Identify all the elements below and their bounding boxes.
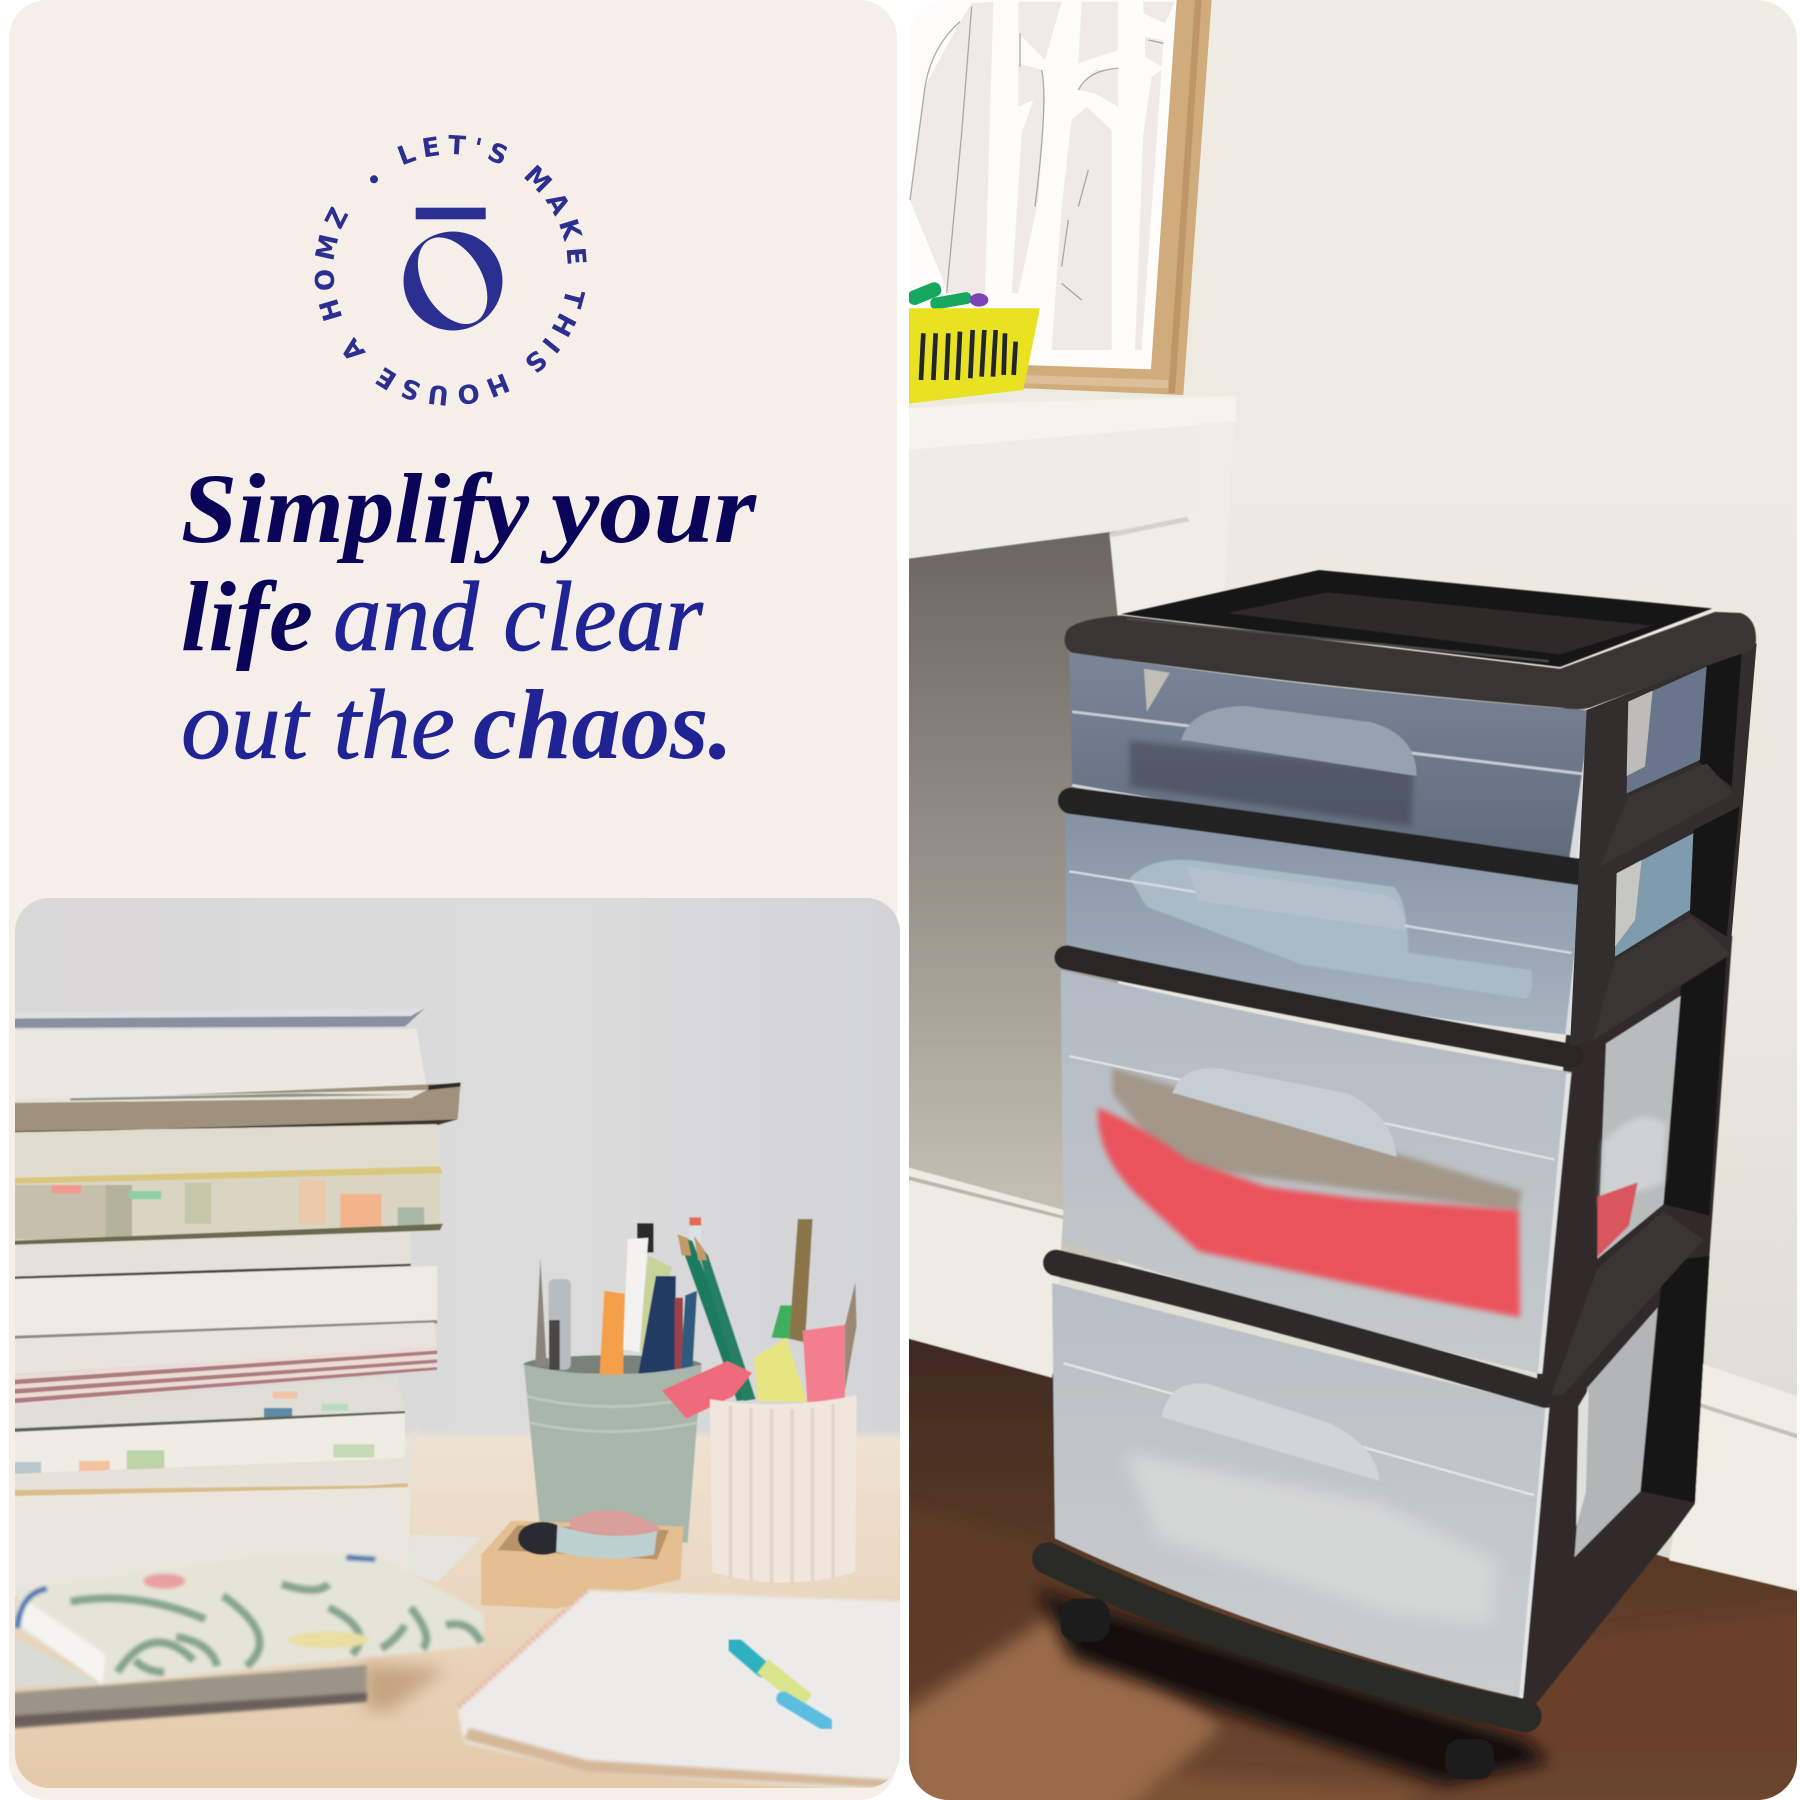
ribbed ceramic cup [710, 1395, 857, 1583]
wall background [15, 898, 900, 1437]
birch bark lines [910, 7, 1163, 300]
logo: dot separator [370, 175, 378, 183]
pink washi tape [662, 1361, 752, 1419]
heading line 3 [181, 669, 733, 780]
band between drawers 1 and 2 [1071, 801, 1583, 872]
rail 2 [1593, 917, 1730, 1040]
cart upper side panel [1570, 643, 1757, 1047]
left baseboard [900, 1165, 1064, 1378]
photo: plastic drawer cart in room corner [900, 0, 1800, 1800]
top frame band [1065, 612, 1756, 709]
rail 1 [1600, 763, 1733, 867]
cast shadow [1038, 1590, 1549, 1785]
band between drawers 3 and 4 [1056, 1263, 1546, 1395]
white desk [900, 396, 1236, 620]
floral fabric book [15, 1555, 484, 1687]
drawer 2 [1065, 809, 1589, 1035]
tan fabric [1112, 1068, 1523, 1211]
wood frame [1023, 0, 1212, 395]
heading line 2: life [181, 561, 313, 672]
right baseboard [1669, 1363, 1800, 1596]
drawer 4 [1052, 1283, 1549, 1698]
spiral notebook [456, 1588, 900, 1788]
logo: circular tagline text: LET'S MAKE THIS HOUSE A HOMZ [314, 134, 587, 406]
lower side windows [1574, 996, 1681, 1557]
logo: tilted ring letter o [404, 225, 502, 336]
wooden tray with tape rolls [481, 1510, 684, 1609]
lower dark book [12, 1663, 446, 1728]
logo: circular badge [314, 134, 587, 406]
heading: Simplify your life and clear out the chaos [181, 453, 757, 780]
logo: macron bar [416, 208, 486, 219]
heading line 3: out the [181, 669, 455, 780]
heading line 1 [181, 453, 757, 564]
cart lid [1121, 570, 1712, 667]
caster wheels [1061, 1599, 1494, 1779]
drawer 1 [1069, 651, 1596, 859]
teal and yellow pen [733, 1644, 827, 1725]
under desk shadow wall [900, 531, 1118, 1263]
heading line 1: your [539, 453, 757, 564]
table surface [0, 1434, 939, 1800]
black slots [1690, 653, 1742, 937]
heading line 2: and clear [333, 561, 704, 672]
drawer cart [1048, 651, 1732, 1779]
red fabric [1098, 1108, 1520, 1317]
pens and pencils [535, 1217, 857, 1402]
rail lower right [1551, 1211, 1704, 1395]
framed tree art [905, 0, 1212, 404]
bottom frame band [1048, 1558, 1526, 1716]
photo: stack of books and desk supplies [0, 880, 939, 1800]
heading line 1: Simplify [181, 453, 530, 564]
cart side frame lower [1511, 936, 1732, 1713]
book stack [12, 1008, 481, 1596]
floor planks [900, 1504, 1800, 1800]
drawer 3 [1061, 970, 1572, 1374]
window 1 [1627, 667, 1707, 793]
white mat and birch trunks [905, 0, 1178, 369]
yellow basket [905, 308, 1040, 404]
wall background [909, 0, 1797, 1800]
medium frame [1570, 643, 1757, 1047]
window 2 [1615, 833, 1693, 957]
lower black slots [1640, 957, 1727, 1503]
floor [900, 1335, 1800, 1800]
pale birch panels [910, 2, 1175, 350]
markers in basket [905, 280, 988, 310]
bucket rim back [523, 1355, 702, 1374]
panel: left cream card [9, 0, 897, 1800]
heading line 2 [181, 561, 704, 672]
green bucket [524, 1365, 702, 1543]
band between drawers 2 and 3 [1066, 957, 1572, 1056]
heading line 3: chaos. [473, 669, 733, 780]
